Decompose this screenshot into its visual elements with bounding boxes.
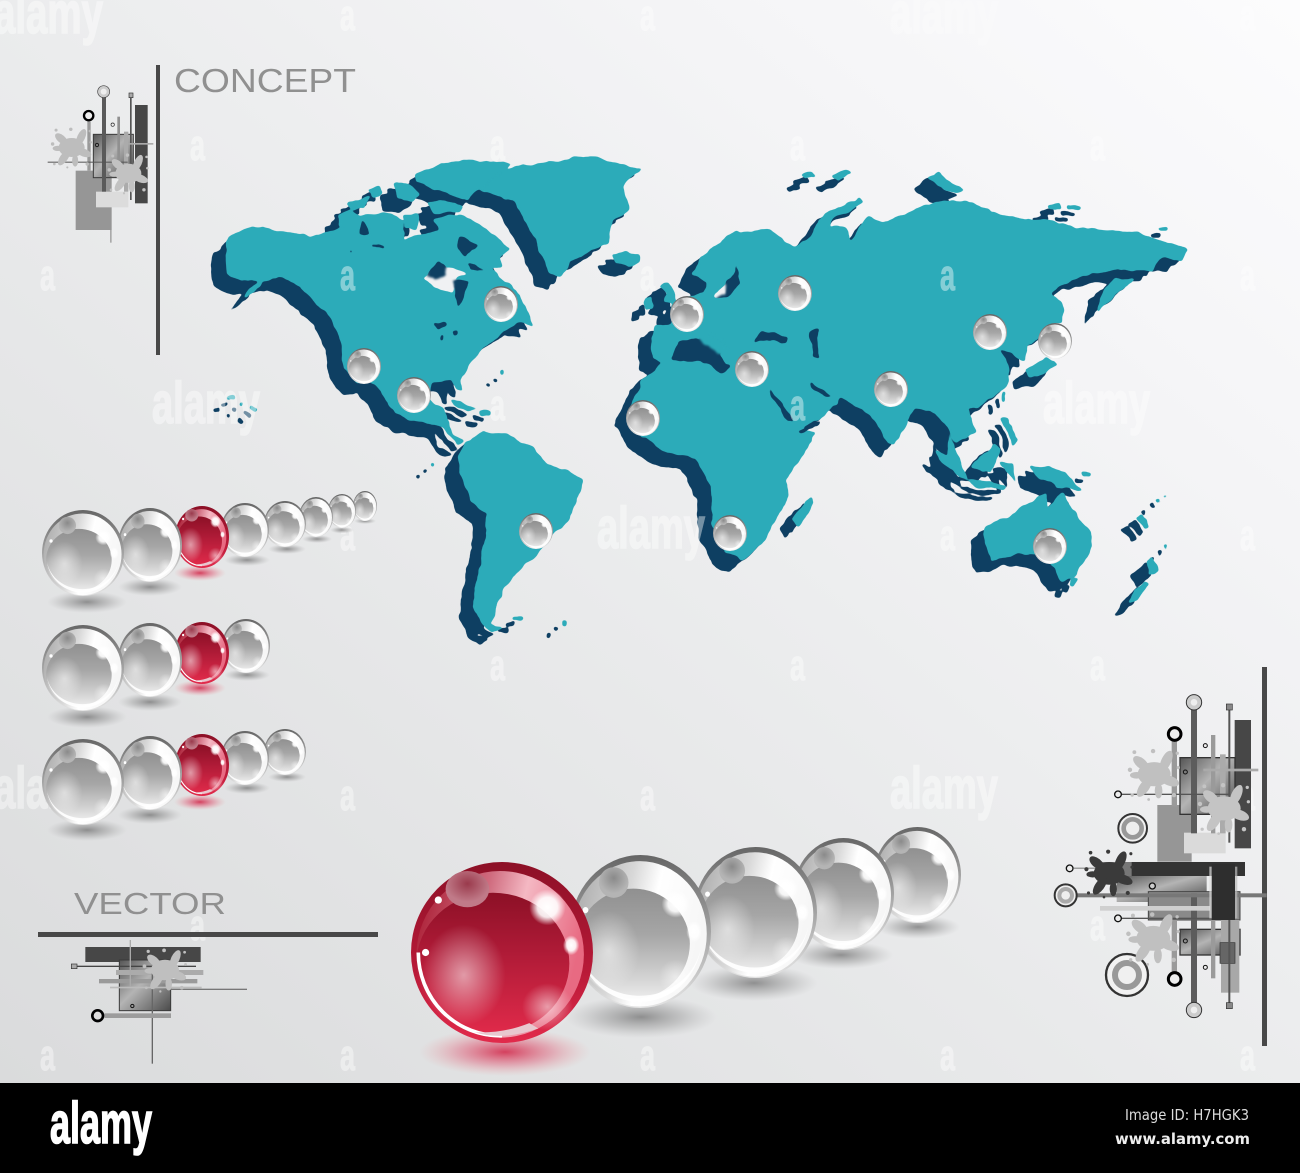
- watermark grid: a: [790, 121, 805, 170]
- watermark grid: a: [1240, 771, 1255, 820]
- watermark grid: a: [790, 641, 805, 690]
- icon: tech emblem top left: [48, 86, 153, 243]
- South America: [458, 430, 583, 632]
- divider line: vector: [38, 932, 378, 937]
- Arctic Eurasia islands: [800, 170, 1167, 237]
- map shadow: [211, 163, 1182, 644]
- footer url: www.alamy.com: [1115, 1130, 1250, 1148]
- large red sphere: [411, 862, 593, 1043]
- watermark grid: a: [640, 1031, 655, 1080]
- sphere row 3: [42, 729, 306, 841]
- world map: [211, 157, 1189, 644]
- Caribbean and Newfoundland: [450, 400, 492, 416]
- watermark grid: a: [190, 901, 205, 950]
- watermark grid: a: [1240, 251, 1255, 300]
- watermark grid: a: [190, 121, 205, 170]
- watermark grid: a: [1090, 901, 1105, 950]
- heading: concept: CONCEPT: [174, 62, 356, 99]
- icon: tech emblem bottom left: [71, 940, 247, 1064]
- watermark grid: a: [40, 251, 55, 300]
- divider line: right: [1262, 667, 1267, 1046]
- icon: tech emblem right: [1055, 695, 1267, 1018]
- watermark grid: alamy: [1043, 371, 1150, 436]
- watermark grid: a: [640, 251, 655, 300]
- watermark grid: a: [340, 251, 355, 300]
- Australia: [985, 493, 1092, 580]
- Arctic islands: [338, 160, 512, 268]
- watermark grid: a: [1240, 1031, 1255, 1080]
- sphere row 1: [42, 491, 377, 613]
- footer logo: alamy: [50, 1091, 152, 1156]
- sphere row 2: [42, 619, 270, 728]
- watermark grid: a: [640, 771, 655, 820]
- watermark grid: a: [1090, 641, 1105, 690]
- watermark grid: a: [190, 641, 205, 690]
- watermark grid: a: [490, 381, 505, 430]
- watermark grid: a: [490, 641, 505, 690]
- Greenland: [480, 157, 643, 278]
- map landmasses: [225, 157, 1189, 632]
- watermark grid: alamy: [152, 371, 260, 436]
- watermark grid: a: [490, 121, 505, 170]
- footer bar: [0, 1083, 1300, 1173]
- watermark grid: a: [340, 511, 355, 560]
- watermark grid: a: [1090, 121, 1105, 170]
- watermark grid: a: [940, 511, 955, 560]
- inland seas and bays: [350, 237, 833, 433]
- heading: vector: VECTOR: [74, 886, 226, 921]
- small Pacific and Atlantic islands: [227, 371, 1169, 626]
- watermark grid: a: [340, 1031, 355, 1080]
- map marker spheres: [347, 275, 1072, 564]
- watermark grid: a: [340, 771, 355, 820]
- large sphere row: [411, 827, 961, 1076]
- Madagascar: [793, 497, 814, 527]
- Southeast Asia islands: [936, 393, 1090, 492]
- North America: [225, 226, 535, 445]
- watermark grid: a: [40, 1031, 55, 1080]
- Eurasia and Africa: [628, 200, 1189, 560]
- watermark grid: alamy: [890, 756, 998, 821]
- Kamchatka, Sakhalin and Japan: [1025, 277, 1134, 377]
- divider line: concept: [156, 65, 160, 355]
- watermark grid: a: [940, 251, 955, 300]
- footer image id: Image ID: H7HGK3: [1125, 1106, 1249, 1124]
- watermark grid: a: [790, 381, 805, 430]
- watermark grid: a: [1240, 511, 1255, 560]
- watermark grid: alamy: [597, 496, 705, 561]
- Tasmania and New Zealand: [1069, 556, 1159, 604]
- watermark grid: a: [940, 1031, 955, 1080]
- Iceland, UK and Ireland: [612, 252, 677, 310]
